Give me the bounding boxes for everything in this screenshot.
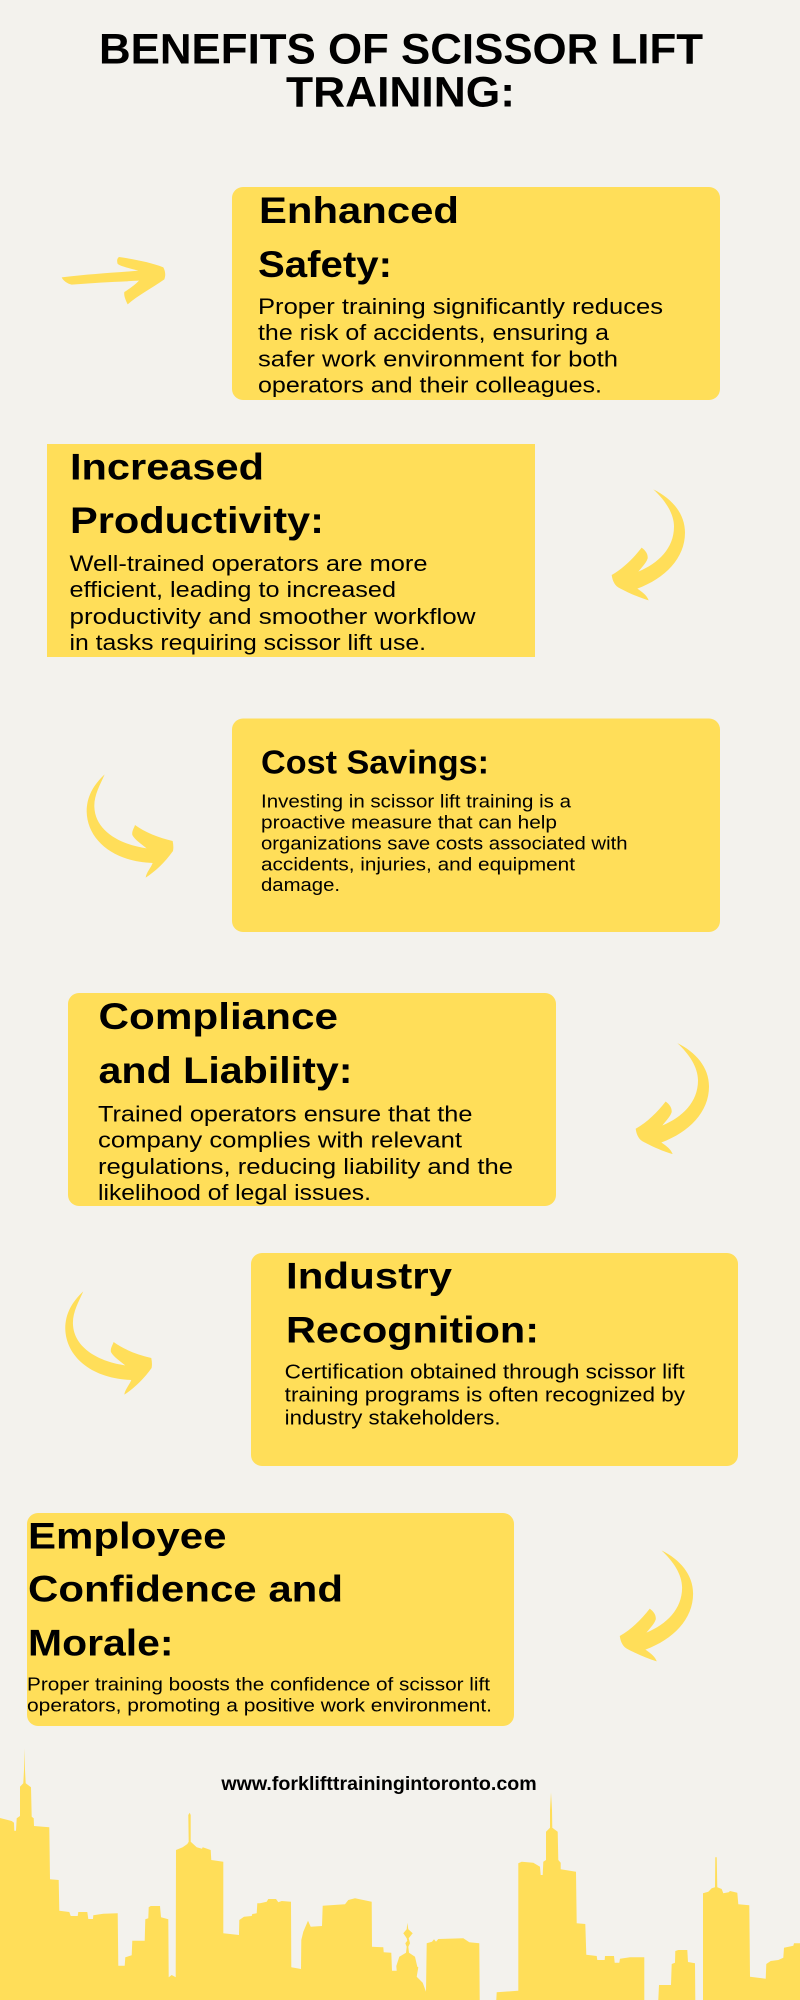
- heading: Morale:: [28, 1621, 174, 1663]
- body text: the risk of accidents, ensuring a: [258, 320, 610, 345]
- heading: [286, 1254, 539, 1350]
- heading: [98, 995, 352, 1091]
- arrow: curved down-left beside employee confidence: [620, 1550, 693, 1661]
- panel background: [47, 444, 535, 657]
- body text: productivity and smoother workflow: [70, 604, 476, 629]
- body text: [27, 1675, 492, 1716]
- heading: [70, 446, 324, 541]
- panel: increased productivity: [47, 444, 535, 657]
- panel background: [27, 1513, 514, 1726]
- arrow: curved down-right beside industry recognition: [65, 1291, 152, 1395]
- body text: Investing in scissor lift training is a: [261, 792, 572, 812]
- heading: Industry: [286, 1254, 452, 1296]
- arrow: curved down-left beside compliance and liability: [636, 1043, 709, 1154]
- city skyline silhouette: [0, 1748, 800, 2000]
- body text: Well-trained operators are more: [70, 551, 428, 576]
- heading: and Liability:: [98, 1049, 352, 1091]
- body text: organizations save costs associated with: [261, 834, 628, 854]
- panel: industry recognition: [251, 1253, 738, 1466]
- panel background: [68, 993, 556, 1206]
- title: [99, 26, 703, 117]
- heading: Compliance: [98, 995, 338, 1037]
- body text: training programs is often recognized by: [285, 1385, 685, 1407]
- panel: employee confidence and morale: [27, 1513, 514, 1726]
- body text: operators and their colleagues.: [258, 373, 602, 398]
- heading: [258, 189, 459, 285]
- body text: operators, promoting a positive work environment.: [27, 1696, 492, 1716]
- body text: [70, 551, 476, 655]
- body text: Proper training boosts the confidence of scissor lift: [27, 1675, 490, 1695]
- body text: regulations, reducing liability and the: [98, 1154, 513, 1179]
- title: BENEFITS OF SCISSOR LIFT: [99, 26, 703, 74]
- body text: Proper training significantly reduces: [258, 294, 663, 319]
- heading: Confidence and: [28, 1567, 343, 1609]
- heading: Increased: [70, 446, 264, 488]
- body text: Certification obtained through scissor lift: [285, 1361, 685, 1383]
- heading: Enhanced: [259, 189, 459, 231]
- body text: Trained operators ensure that the: [98, 1101, 472, 1126]
- heading: Employee: [28, 1514, 226, 1556]
- heading: Productivity:: [70, 499, 324, 541]
- body text: in tasks requiring scissor lift use.: [70, 630, 426, 655]
- heading: [28, 1514, 343, 1663]
- arrow: right-pointing to enhanced safety: [62, 257, 165, 304]
- body text: [98, 1101, 513, 1205]
- body text: efficient, leading to increased: [70, 577, 396, 602]
- arrow: curved down-right beside cost savings: [87, 774, 173, 878]
- body text: [285, 1361, 685, 1429]
- panel: compliance and liability: [68, 993, 556, 1206]
- panel background: [251, 1253, 738, 1466]
- body text: accidents, injuries, and equipment: [261, 854, 575, 874]
- body text: proactive measure that can help: [261, 813, 557, 833]
- panel background: [232, 187, 720, 400]
- website url: www.forklifttrainingintoronto.com: [220, 1774, 537, 1795]
- panel background: [232, 718, 720, 932]
- panel: cost savings: [232, 718, 720, 932]
- body text: company complies with relevant: [98, 1127, 462, 1152]
- heading: Cost Savings:: [261, 744, 489, 781]
- heading: Safety:: [258, 243, 392, 285]
- body text: [261, 792, 628, 895]
- panel: enhanced safety: [232, 187, 720, 400]
- body text: industry stakeholders.: [285, 1407, 500, 1429]
- body text: likelihood of legal issues.: [98, 1180, 371, 1205]
- body text: [258, 294, 663, 398]
- title: TRAINING:: [286, 69, 515, 117]
- body text: safer work environment for both: [258, 347, 618, 372]
- heading: Recognition:: [286, 1308, 539, 1350]
- arrow: curved down-left beside increased productivity: [612, 489, 685, 600]
- body text: damage.: [261, 875, 340, 895]
